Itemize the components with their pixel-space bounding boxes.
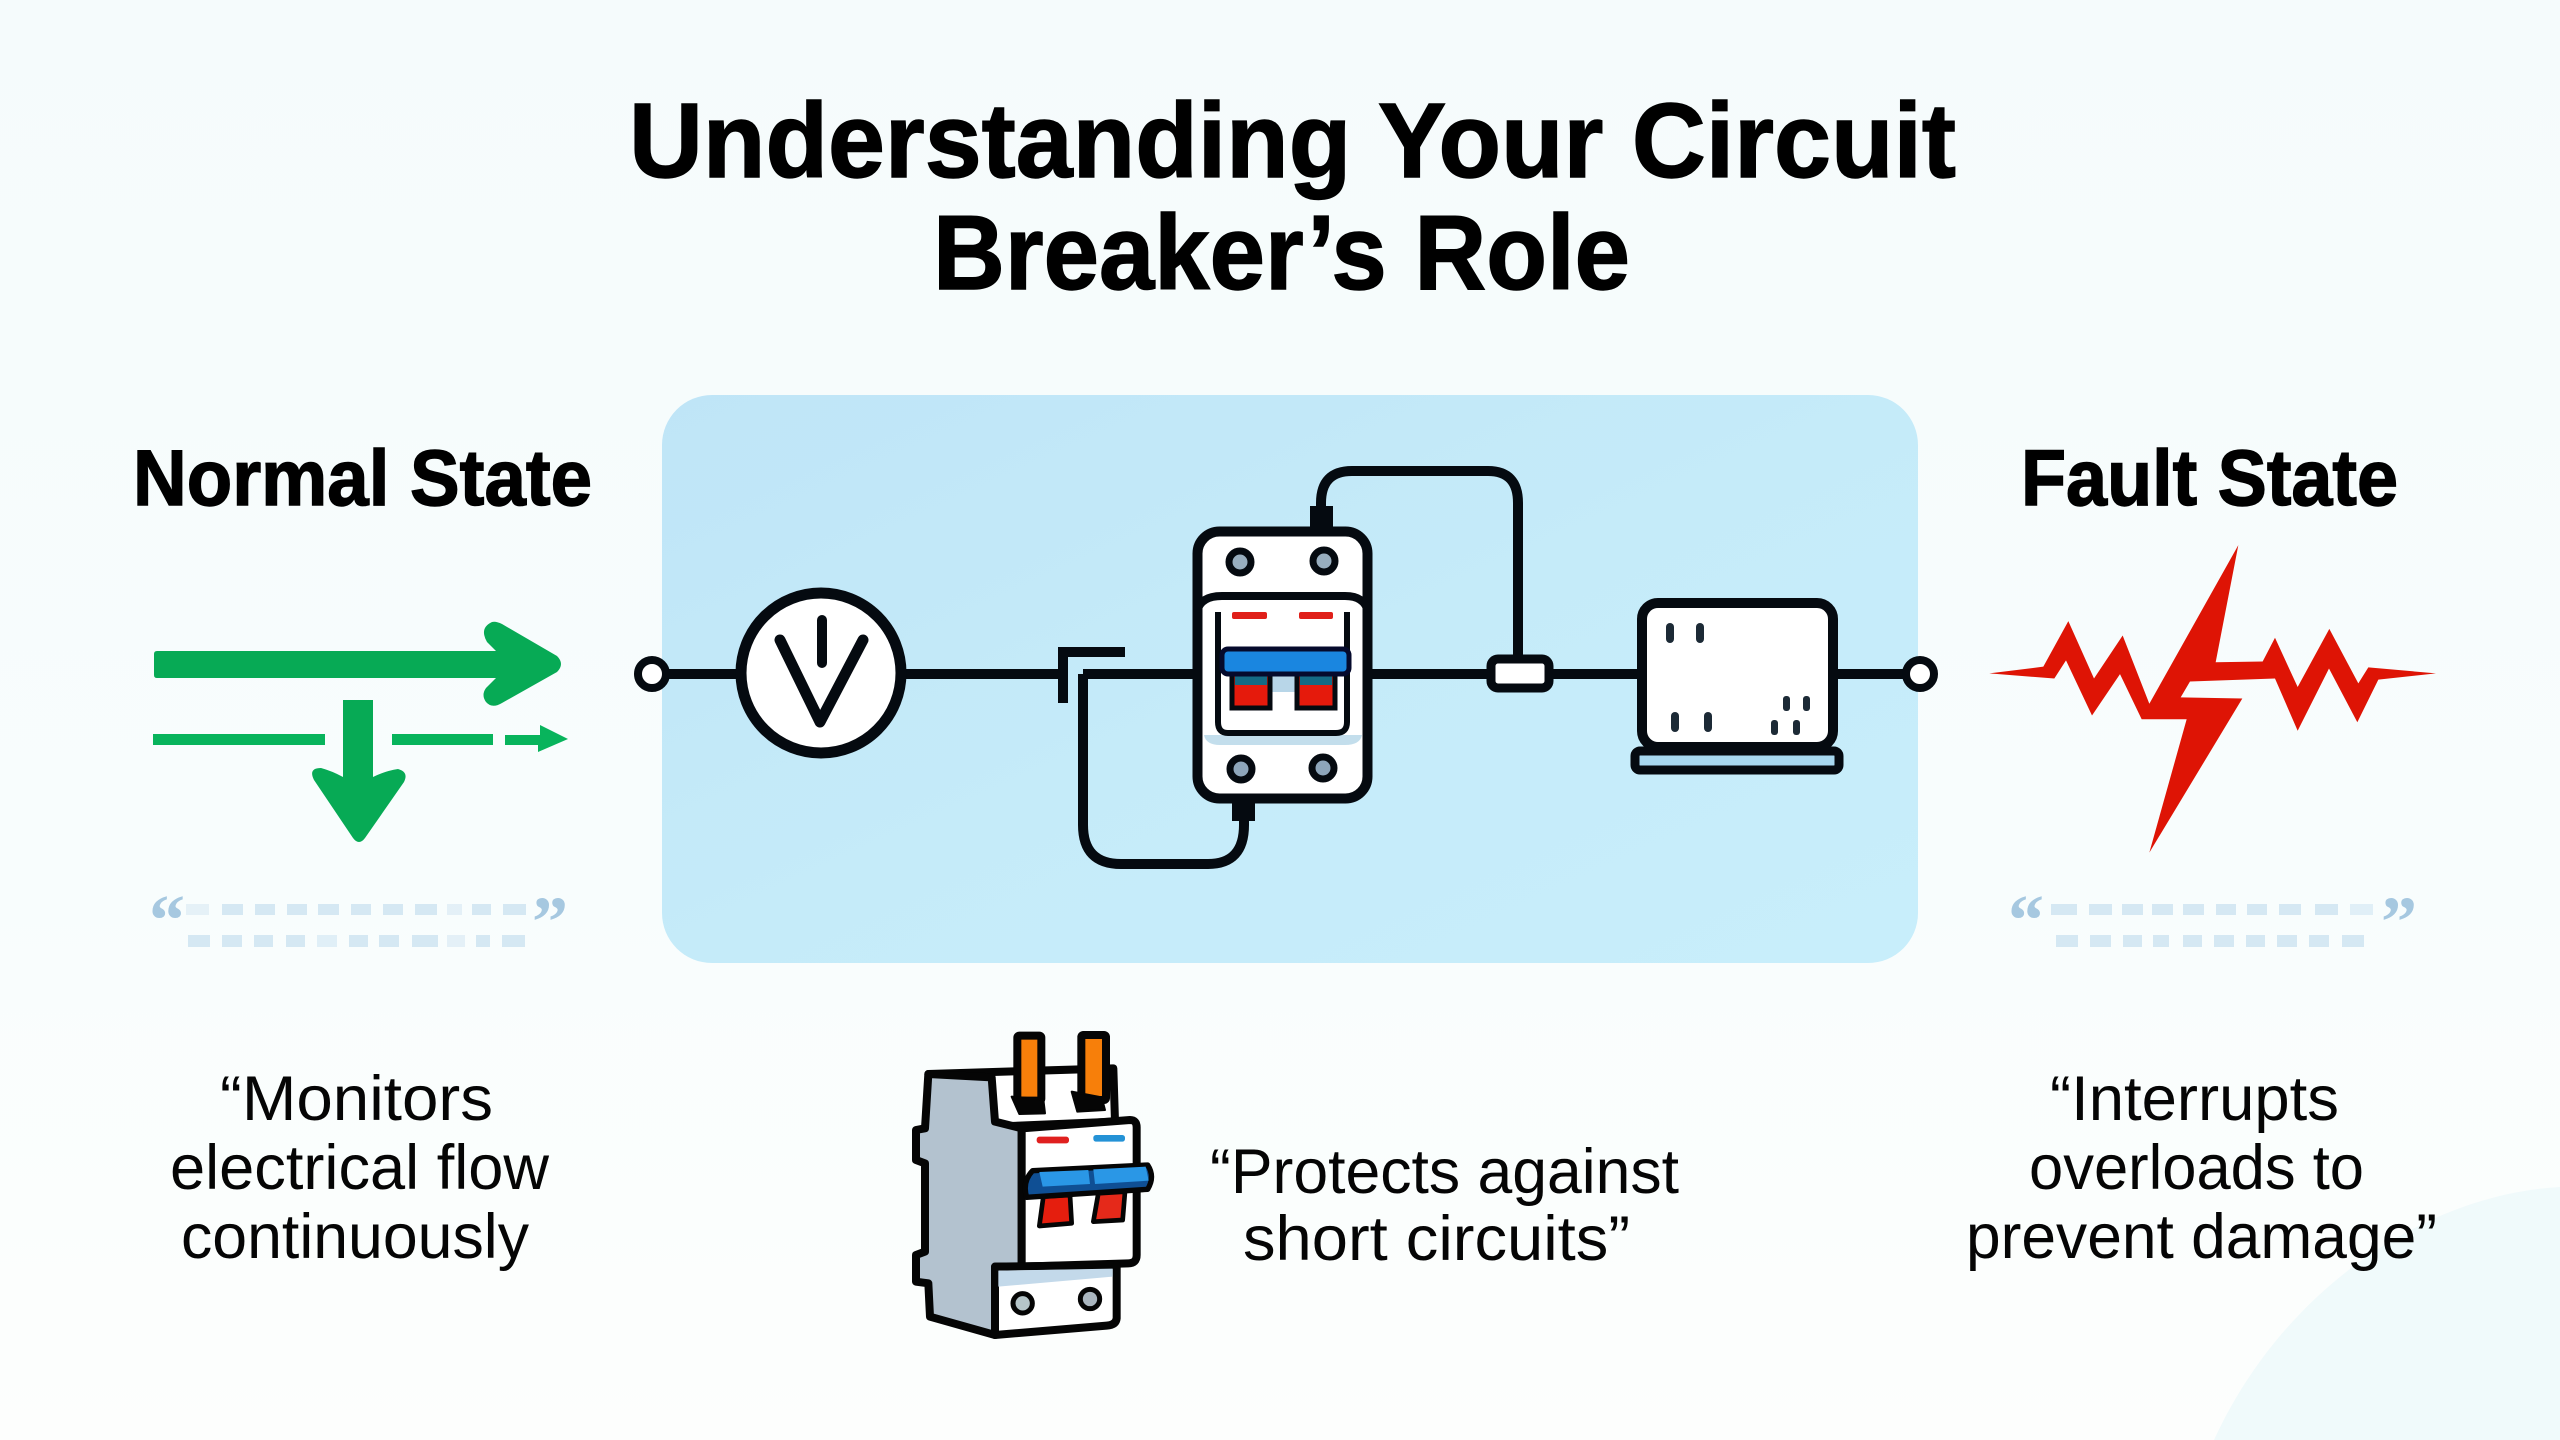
- text: monitors: [170, 1064, 550, 1272]
- quote mark open: “: [149, 880, 185, 960]
- red windows: [1039, 1195, 1072, 1226]
- front face: [1022, 1120, 1137, 1267]
- upper loop wire: [1321, 471, 1518, 657]
- placeholder caption: fault state: [2008, 880, 2417, 962]
- text: protects: “Protects against: [1210, 1137, 1679, 1207]
- title: [629, 82, 1956, 312]
- icon: voltmeter: [741, 593, 901, 753]
- text: protects: short circuits”: [1243, 1204, 1630, 1274]
- text: monitors: electrical flow: [170, 1133, 550, 1203]
- text: monitors: “Monitors: [220, 1064, 493, 1134]
- icon: central circuit breaker: [1197, 506, 1368, 821]
- text: protects: [1210, 1137, 1679, 1274]
- quote mark open: “: [2008, 880, 2044, 960]
- quote mark close: ”: [2381, 882, 2417, 962]
- text: interrupts: overloads to: [2029, 1133, 2364, 1203]
- side panel: [916, 1074, 1022, 1335]
- icon: right terminal: [1906, 660, 1934, 688]
- icon: normal current arrows: [153, 622, 568, 842]
- downward arrow: [312, 700, 406, 842]
- branch line segments: [153, 725, 568, 752]
- icon: in-line fuse: [1491, 659, 1549, 688]
- icon: left terminal: [638, 660, 666, 688]
- heading: normal state: Normal State: [133, 433, 592, 522]
- icon: protected device: [1635, 603, 1839, 770]
- placeholder caption: normal state: [149, 880, 568, 962]
- quote mark close: ”: [532, 882, 568, 962]
- indicator dashes: [1037, 1137, 1069, 1143]
- lower loop wire: [1083, 674, 1244, 864]
- blue toggle bar: [1025, 1165, 1151, 1197]
- main flow arrow: [154, 622, 561, 706]
- text: interrupts: prevent damage”: [1966, 1202, 2437, 1272]
- text: interrupts: “Interrupts: [2050, 1064, 2339, 1134]
- title: Understanding Your Circuit: [629, 82, 1956, 200]
- heading: fault state: Fault State: [2021, 433, 2398, 522]
- text: monitors: continuously: [181, 1202, 529, 1272]
- icon: 3D circuit breaker: [916, 1035, 1151, 1335]
- orange handles: [1012, 1035, 1106, 1114]
- icon: fault lightning surge: [1989, 545, 2436, 853]
- panel: circuit diagram: [638, 395, 1934, 963]
- wires: [668, 669, 1904, 679]
- top block: [928, 1068, 1115, 1127]
- bottom terminal block: [995, 1265, 1117, 1335]
- title: Breaker’s Role: [933, 194, 1630, 312]
- icon: open switch contact: [1063, 652, 1125, 703]
- text: interrupts: [1966, 1064, 2437, 1272]
